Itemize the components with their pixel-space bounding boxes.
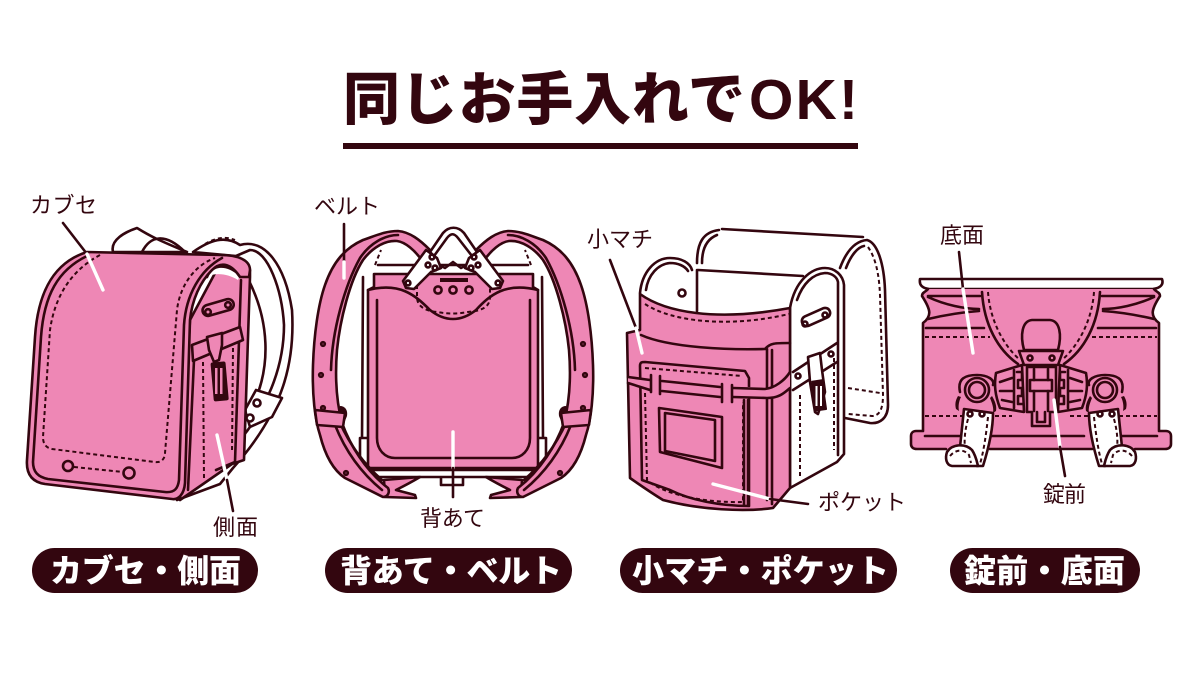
label: kabuse <box>30 193 103 290</box>
label: side: 側面 <box>213 515 258 540</box>
back pad <box>368 274 538 468</box>
right side panel <box>790 268 844 488</box>
icon: lock assembly <box>995 320 1087 426</box>
top handle <box>430 228 477 268</box>
pill: gusset and pocket: 小マチ・ポケット <box>632 553 889 589</box>
panel: small gusset and pocket <box>587 227 906 515</box>
label: pocket: ポケット <box>818 490 906 515</box>
left gusset top <box>640 258 692 296</box>
rivets <box>63 461 134 478</box>
label: belt: ベルト <box>314 194 380 219</box>
label: pocket <box>713 484 906 515</box>
label: lock: 錠前 <box>1043 482 1086 507</box>
title: OK! <box>749 68 858 132</box>
icon: side strap and lock <box>192 327 243 402</box>
label: gusset <box>587 227 653 353</box>
bag straps behind <box>113 228 292 500</box>
title: 同じお手入れで <box>343 68 745 132</box>
label: back pad <box>420 432 485 531</box>
label: belt <box>314 194 380 278</box>
frame <box>360 250 546 485</box>
pill: back and belt: 背あて・ベルト <box>340 553 562 589</box>
label: back pad: 背あて <box>420 506 485 531</box>
pill: lock and bottom <box>950 548 1140 593</box>
strap <box>628 372 790 398</box>
label: bottom: 底面 <box>940 223 984 248</box>
back flap <box>697 229 888 423</box>
pill: lock and bottom: 錠前・底面 <box>964 553 1125 589</box>
cover flap <box>27 252 250 499</box>
title underline <box>343 143 858 149</box>
belt right <box>465 231 593 498</box>
label: gusset: 小マチ <box>587 227 653 252</box>
panel: back pad and belts <box>313 194 593 531</box>
icon: side plate <box>201 298 235 317</box>
label: lock <box>1043 400 1086 507</box>
label: bottom <box>940 223 984 353</box>
pink gusset and pocket <box>627 294 790 510</box>
bottom body <box>911 279 1171 449</box>
panel: lock and bottom <box>911 223 1171 507</box>
icon: right buckle and strap <box>1086 375 1136 466</box>
side panel <box>180 260 250 500</box>
icon: name window <box>659 408 722 468</box>
panel: cover and side bag <box>27 193 292 540</box>
pill: cover and side: カブセ・側面 <box>50 553 241 589</box>
icon: lock <box>808 353 827 414</box>
label: side <box>213 435 258 540</box>
label: kabuse: カブセ <box>30 193 97 218</box>
pill: cover and side <box>32 548 258 593</box>
icon: left buckle and strap <box>946 375 996 466</box>
belt left <box>313 231 441 498</box>
